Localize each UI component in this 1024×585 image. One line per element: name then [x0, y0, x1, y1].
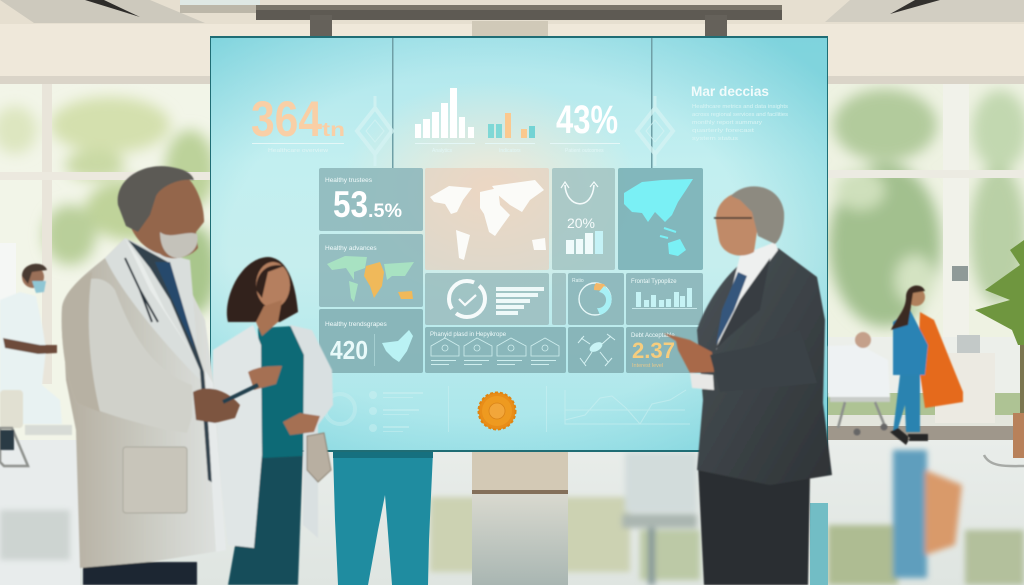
figure: male doctor left	[62, 166, 258, 585]
panel: arrow 20% bars	[552, 168, 615, 270]
panel: 53.5% stat: .5%	[368, 201, 402, 222]
panel: network icon	[568, 327, 624, 373]
large display screen	[210, 36, 828, 452]
panel: cyan Asia map	[618, 168, 703, 270]
panel: regional count 420: Healthy trendsgrapes	[325, 321, 388, 328]
panel: bar chart typology: Frontal Typoplize	[631, 279, 677, 285]
screen stand	[472, 450, 568, 585]
panel: world map orange: Healthy advances	[325, 245, 377, 252]
panel: large world map	[425, 168, 549, 270]
ceiling	[0, 0, 1024, 24]
faint line chart	[565, 390, 690, 424]
panel: regional count 420: 420	[330, 335, 368, 365]
text block: Mar deccias: system status	[692, 136, 739, 142]
panel: donut chart	[568, 273, 624, 325]
panel: check progress	[425, 273, 549, 325]
panel: 2.37 stat	[626, 327, 703, 373]
head	[125, 171, 204, 258]
text block: Mar deccias: Healthcare metrics and data insights	[692, 104, 789, 110]
figure: nurse with patient on left	[0, 264, 72, 466]
figure: man in suit	[663, 186, 832, 585]
text block: Mar deccias: monthly report summary	[692, 120, 763, 126]
stat: 364: Healthcare overview	[268, 148, 328, 154]
panel: donut chart: Ratio	[572, 278, 584, 284]
figure: patient bed right	[828, 332, 890, 436]
stat: 364: tn	[322, 120, 345, 141]
white coat	[62, 238, 226, 568]
figure: scrub person behind screen	[333, 452, 433, 585]
panel: arrow 20% bars: 20%	[567, 215, 595, 231]
reflective floor	[0, 440, 1024, 585]
text block: Mar deccias: Mar deccias	[691, 83, 769, 99]
panel: house icons: Phanyid plasd in Hepyikrope	[430, 332, 507, 338]
panel: 53.5% stat	[319, 168, 423, 231]
panel: 2.37 stat: 2.37	[632, 338, 675, 363]
ceiling projector rail	[256, 5, 782, 36]
text block: Mar deccias: quarterly forecast	[692, 128, 755, 134]
figure: staff in blue and orange	[890, 285, 963, 445]
panel: bar chart typology	[626, 273, 703, 325]
left window	[0, 76, 217, 442]
right window	[826, 76, 1024, 442]
figure: female doctor	[212, 257, 333, 585]
panel: house icons	[425, 327, 566, 373]
faint lower-left legend	[325, 386, 547, 432]
text block: Mar deccias: across regional services and facilities	[692, 112, 789, 118]
panel: 2.37 stat: Interest level	[632, 363, 663, 369]
panel: narrow spacer	[552, 273, 566, 325]
plant	[975, 240, 1024, 466]
panel: world map orange	[319, 234, 423, 307]
panel: 53.5% stat: Healthy trustees	[325, 177, 373, 184]
medical cart	[935, 335, 995, 423]
panel: 2.37 stat: Debt Acceptable	[631, 333, 675, 339]
stat: 43%: 43%	[556, 98, 618, 142]
icon: diamond right	[637, 96, 673, 166]
stat: 364: 364	[251, 91, 322, 147]
chart labels: Analytics	[432, 148, 453, 154]
stat: 43%	[550, 98, 620, 154]
chart labels	[415, 143, 535, 154]
panel: regional count 420	[319, 309, 423, 373]
chart labels: Indicators	[499, 148, 521, 154]
text block: Mar deccias	[691, 83, 789, 142]
panel: 53.5% stat: 53	[333, 184, 368, 225]
icon: diamond left	[357, 96, 392, 166]
bar chart: white	[415, 88, 474, 138]
icon: orange sunburst	[478, 392, 516, 430]
stat: 43%: Patient outcomes	[565, 148, 604, 154]
bar chart: teal and orange	[488, 113, 535, 138]
